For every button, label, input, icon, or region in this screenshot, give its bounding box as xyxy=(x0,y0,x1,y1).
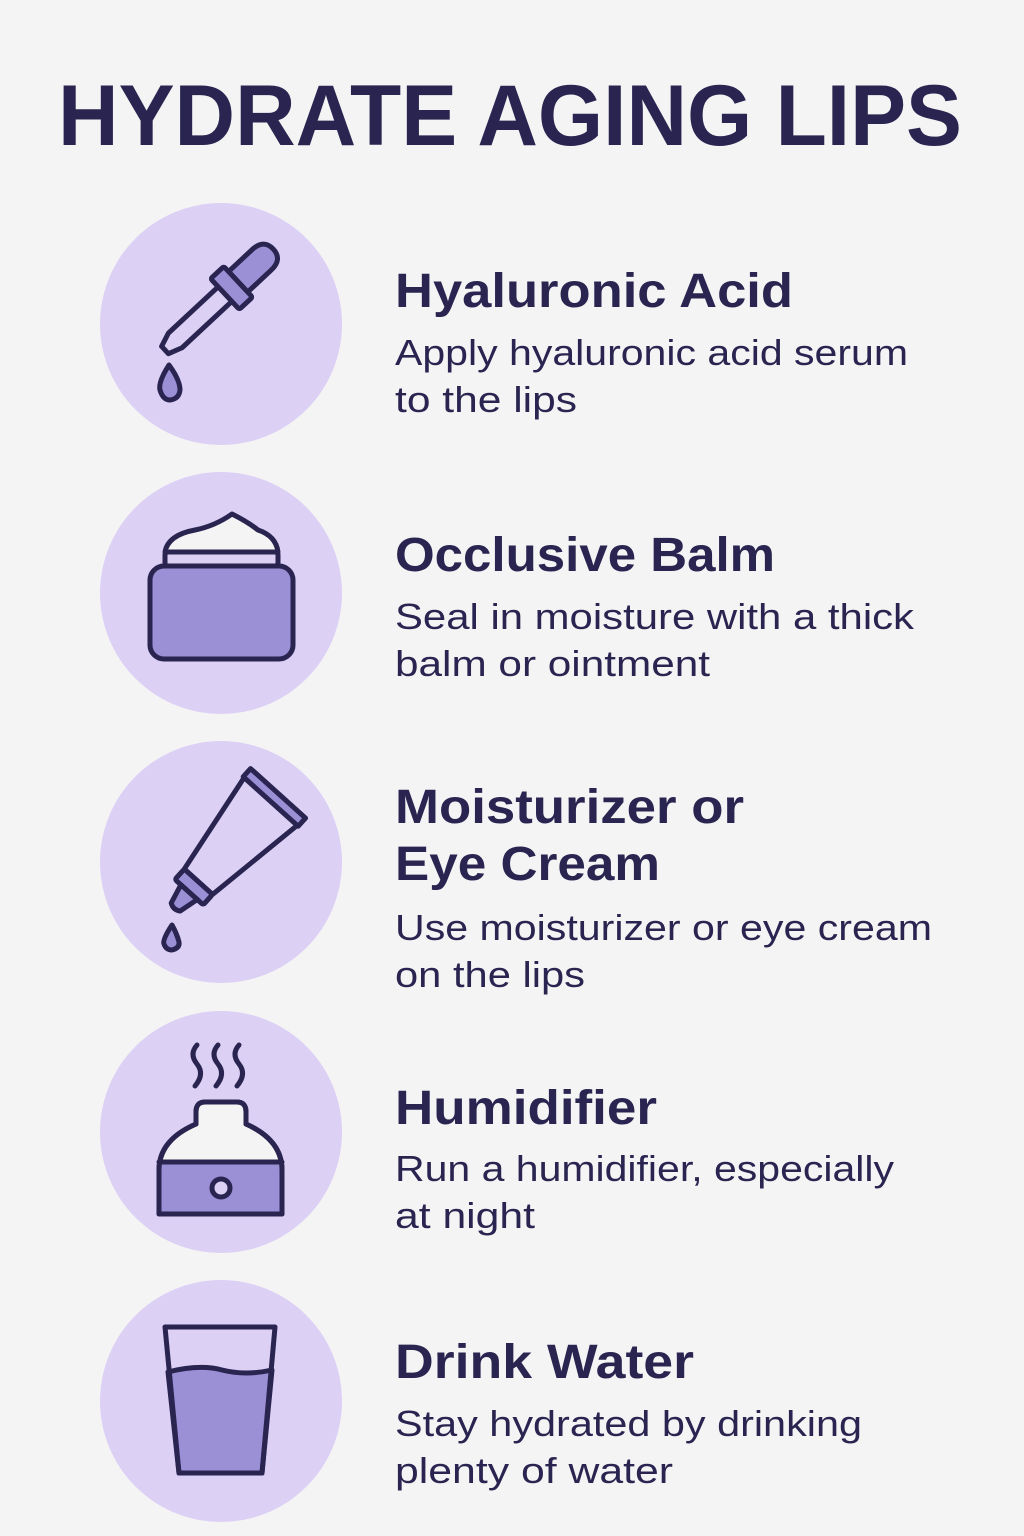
icon: humidifier xyxy=(100,1011,342,1253)
body text: at night xyxy=(395,1195,535,1236)
item: humidifier xyxy=(100,1011,894,1253)
icon: dropper xyxy=(100,203,342,445)
body text: plenty of water xyxy=(395,1450,673,1491)
body text: Apply hyaluronic acid serum xyxy=(395,332,908,373)
body text: Seal in moisture with a thick xyxy=(395,596,915,637)
item: drink water xyxy=(100,1280,862,1522)
icon: glass of water xyxy=(100,1280,342,1522)
item: hyaluronic acid xyxy=(100,203,908,445)
body text xyxy=(395,332,908,420)
body text xyxy=(395,1403,862,1491)
body text: on the lips xyxy=(395,954,585,995)
body text: balm or ointment xyxy=(395,643,710,684)
body text xyxy=(395,1148,894,1236)
body text xyxy=(395,596,915,684)
icon: tube xyxy=(100,741,342,983)
item: occlusive balm xyxy=(100,472,915,714)
body text: Use moisturizer or eye cream xyxy=(395,907,932,948)
body text xyxy=(395,907,932,995)
heading: Drink Water xyxy=(395,1336,694,1389)
heading: Eye Cream xyxy=(395,838,660,891)
heading xyxy=(395,781,744,891)
heading: Occlusive Balm xyxy=(395,529,775,582)
body text: Run a humidifier, especially xyxy=(395,1148,894,1189)
body text: to the lips xyxy=(395,379,577,420)
heading: Hyaluronic Acid xyxy=(395,265,793,318)
heading: Humidifier xyxy=(395,1082,657,1135)
icon: jar xyxy=(100,472,342,714)
heading: Moisturizer or xyxy=(395,781,744,834)
title: HYDRATE AGING LIPS xyxy=(58,68,962,164)
body text: Stay hydrated by drinking xyxy=(395,1403,862,1444)
item: moisturizer xyxy=(100,741,932,995)
